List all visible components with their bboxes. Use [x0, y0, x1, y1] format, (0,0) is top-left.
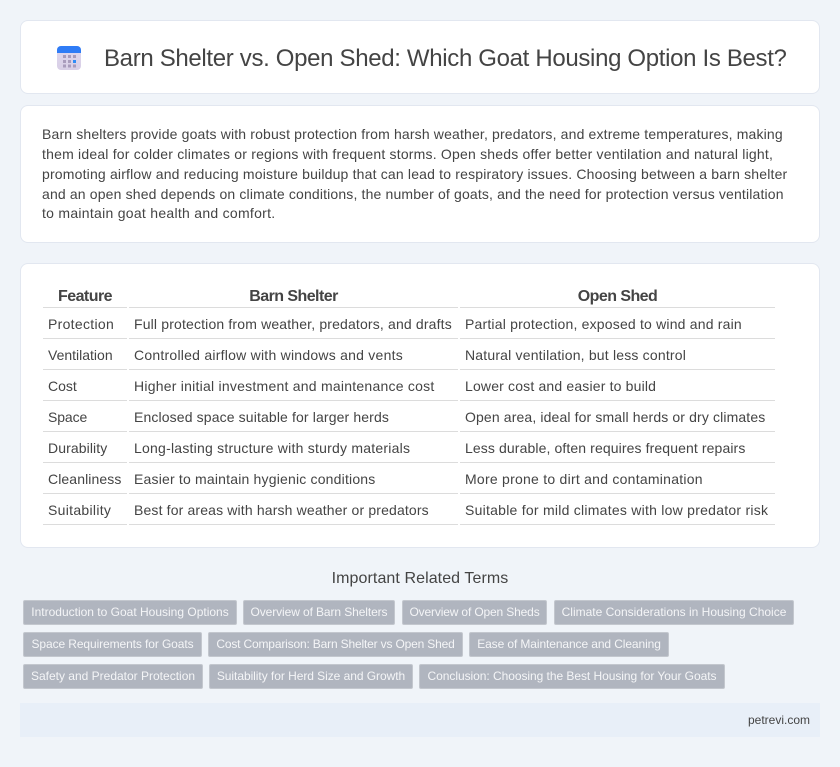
row: protection: Partial protection, exposed to wind and rain [465, 316, 742, 332]
intro text [42, 126, 787, 221]
icon: calendar [57, 46, 81, 70]
intro text: to maintain goat health and comfort. [42, 205, 275, 221]
row: space: Enclosed space suitable for larger herds [134, 409, 389, 425]
row: space: Open area, ideal for small herds or dry climates [465, 409, 765, 425]
tag [554, 600, 794, 625]
tag [402, 600, 547, 625]
row: cost: Lower cost and easier to build [465, 378, 656, 394]
row: cost: Cost [48, 378, 77, 394]
row: cleanliness: Cleanliness [48, 471, 121, 487]
intro paragraph card [20, 105, 820, 243]
row: cleanliness: Easier to maintain hygienic conditions [134, 471, 375, 487]
row: ventilation: Ventilation [48, 347, 113, 363]
tag [243, 600, 395, 625]
row: suitability: Suitable for mild climates with low predator risk [465, 502, 768, 518]
row: suitability: Suitability [48, 502, 111, 518]
tag: Safety and Predator Protection [31, 669, 195, 683]
table header: Feature [58, 288, 112, 305]
tag: Climate Considerations in Housing Choice [562, 605, 786, 619]
row: cost [48, 378, 656, 394]
tag [419, 664, 725, 689]
footer site name: petrevi.com [748, 713, 810, 727]
tag: Overview of Barn Shelters [251, 605, 387, 619]
row: durability: Less durable, often requires frequent repairs [465, 440, 745, 456]
tag [209, 664, 413, 689]
tag: Suitability for Herd Size and Growth [217, 669, 405, 683]
row: ventilation [48, 347, 686, 363]
related terms tags [23, 600, 794, 689]
row: durability: Long-lasting structure with sturdy materials [134, 440, 410, 456]
intro text: promoting airflow and reducing moisture buildup that can lead to respiratory issues. Choosing between a barn shelter [42, 166, 787, 182]
row: protection [48, 316, 742, 332]
tag [23, 632, 202, 657]
row: suitability [48, 502, 768, 518]
tag [208, 632, 463, 657]
title: Barn Shelter vs. Open Shed: Which Goat Housing Option Is Best? [104, 45, 787, 72]
intro text: and an open shed depends on climate conditions, the number of goats, and the need for protection versus ventilation [42, 186, 784, 202]
row: cleanliness: More prone to dirt and contamination [465, 471, 703, 487]
comparison table card [20, 263, 820, 548]
tag [23, 664, 203, 689]
row: suitability: Best for areas with harsh weather or predators [134, 502, 429, 518]
row: cleanliness [48, 471, 703, 487]
intro text: Barn shelters provide goats with robust protection from harsh weather, predators, and extreme temperatures, making [42, 126, 783, 142]
row: durability [48, 440, 745, 456]
tag: Conclusion: Choosing the Best Housing for Your Goats [428, 669, 716, 683]
tag: Space Requirements for Goats [32, 637, 193, 651]
intro text: them ideal for colder climates or regions with frequent storms. Open sheds offer better ventilation and natural light, [42, 146, 773, 162]
row: durability: Durability [48, 440, 107, 456]
tag [469, 632, 669, 657]
related terms heading: Important Related Terms [332, 570, 508, 587]
table header [58, 288, 657, 305]
tag [23, 600, 237, 625]
row: space [48, 409, 765, 425]
tag: Ease of Maintenance and Cleaning [477, 637, 661, 651]
row: ventilation: Natural ventilation, but less control [465, 347, 686, 363]
row: ventilation: Controlled airflow with windows and vents [134, 347, 403, 363]
row: protection: Full protection from weather, predators, and drafts [134, 316, 452, 332]
tag: Overview of Open Sheds [409, 605, 540, 619]
row: protection: Protection [48, 316, 114, 332]
tag: Introduction to Goat Housing Options [31, 605, 229, 619]
tag: Cost Comparison: Barn Shelter vs Open Shed [216, 637, 455, 651]
table header: Open Shed [578, 288, 657, 305]
table [43, 288, 775, 525]
table header: Barn Shelter [249, 288, 338, 305]
row: space: Space [48, 409, 87, 425]
row: cost: Higher initial investment and maintenance cost [134, 378, 435, 394]
title card [20, 20, 820, 94]
footer [20, 703, 820, 737]
